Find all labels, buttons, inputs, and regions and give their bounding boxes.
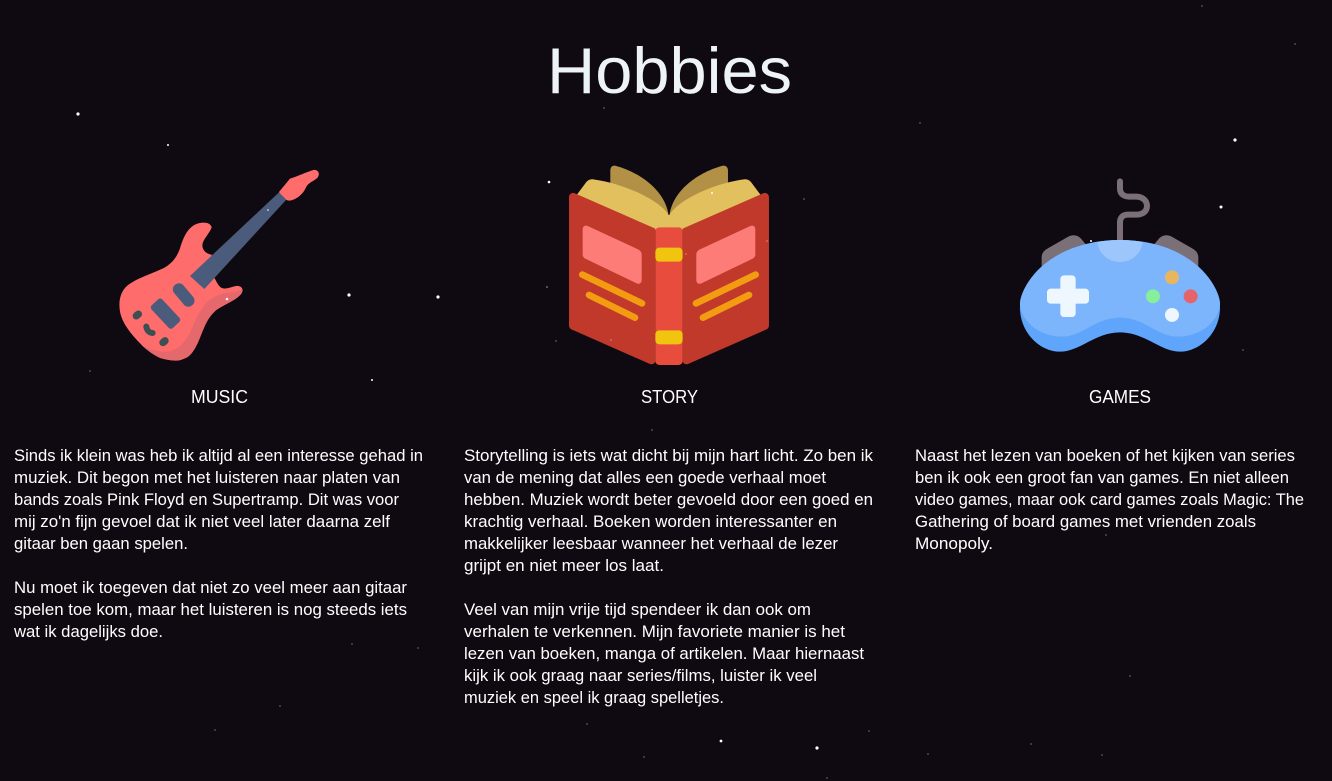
text block: games [915,446,1304,553]
icon: guitar [119,170,319,361]
text block: story: krachtig verhaal. Boeken worden interessanter en [464,512,837,531]
text block: story: grijpt en niet meer los laat. [464,556,664,575]
text block: story: hebben. Muziek wordt beter gevoeld door een goed en [464,490,873,509]
text block: music: gitaar ben gaan spelen. [14,534,188,553]
text block: story: Storytelling is iets wat dicht bij mijn hart licht. Zo ben ik [464,446,873,465]
text block: music: bands zoals Pink Floyd en Supertramp. Dit was voor [14,490,399,509]
text block: music: wat ik dagelijks doe. [13,622,163,641]
heading: music: MUSIC [191,387,248,407]
text block: story: Veel van mijn vrije tijd spendeer ik dan ook om [464,600,811,619]
heading: games: GAMES [1089,387,1151,407]
text block: games: Naast het lezen van boeken of het kijken van series [915,446,1295,465]
text block: story [464,446,873,707]
text block: story: verhalen te verkennen. Mijn favoriete manier is het [464,622,845,641]
text block: story: lezen van boeken, manga of artikelen. Maar hiernaast [464,644,864,663]
text block: music: mij zo'n fijn gevoel dat ik niet veel later daarna zelf [14,512,390,531]
title: Hobbies [547,34,792,107]
heading: story: STORY [641,387,698,407]
text block: music: Nu moet ik toegeven dat niet zo veel meer aan gitaar [14,578,407,597]
text block: games: video games, maar ook card games zoals Magic: The [915,490,1304,509]
text block: story: makkelijker leesbaar wanneer het verhaal de lezer [464,534,838,553]
text block: story: kijk ik ook graag naar series/films, luister ik veel [464,666,817,685]
text block: music [13,446,423,641]
icon: game controller [1020,181,1220,352]
text block: story: van de mening dat alles een goede verhaal moet [464,468,826,487]
text block: games: ben ik ook een groot fan van games. En niet alleen [915,468,1289,487]
icon: open book [569,166,769,365]
text block: music: Sinds ik klein was heb ik altijd al een interesse gehad in [14,446,423,465]
text block: games: Gathering of board games met vrienden zoals [915,512,1256,531]
text block: music: muziek. Dit begon met het luisteren naar platen van [14,468,400,487]
text block: story: muziek en speel ik graag spelletjes. [464,688,724,707]
text block: games: Monopoly. [915,534,993,553]
text block: music: spelen toe kom, maar het luisteren is nog steeds iets [14,600,407,619]
